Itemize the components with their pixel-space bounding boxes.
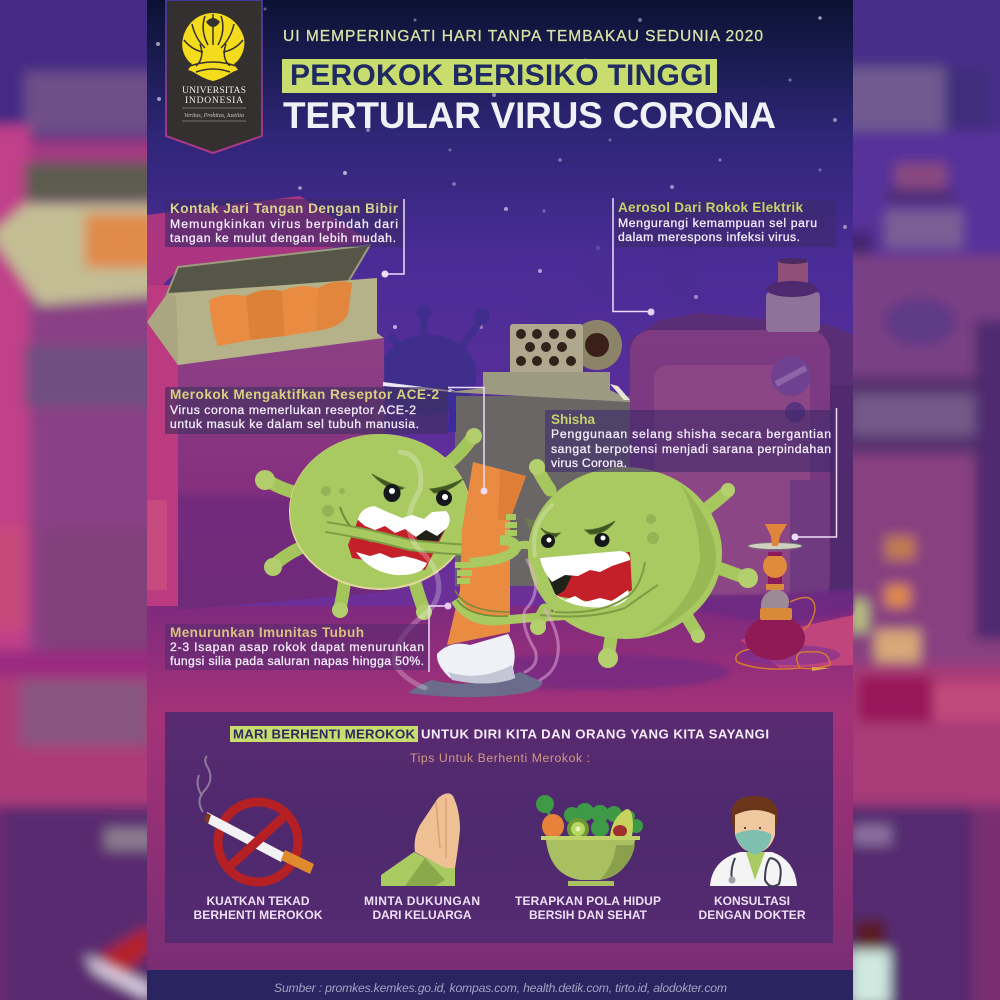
- text: aerosol: dalam merespons infeksi virus.: [618, 230, 800, 244]
- text: university name: UNIVERSITAS: [182, 85, 246, 96]
- central poster background: [147, 0, 853, 1000]
- icon: praying hands: [381, 793, 460, 886]
- panel: immunity: [165, 602, 452, 672]
- text: ACE-2 receptor: [170, 403, 419, 431]
- text: finger to lips: [170, 217, 398, 245]
- text: immunity: fungsi silia pada saluran napas hingga 50%.: [170, 654, 424, 668]
- heading: aerosol: Aerosol Dari Rokok Elektrik: [618, 200, 803, 215]
- blurred left side band: [0, 0, 160, 1000]
- title second line: TERTULAR VIRUS CORONA: [283, 95, 776, 136]
- title highlight: PEROKOK BERISIKO TINGGI: [290, 59, 712, 92]
- text: healthy lifestyle: BERSIH DAN SEHAT: [529, 908, 648, 922]
- text: family support: MINTA DUKUNGAN: [364, 894, 480, 908]
- subheading: Tips Untuk Berhenti Merokok :: [410, 751, 590, 765]
- text: aerosol: Mengurangi kemampuan sel paru: [618, 216, 817, 230]
- heading: ACE-2 receptor: Merokok Mengaktifkan Reseptor ACE-2: [170, 387, 439, 402]
- text: consult doctor: DENGAN DOKTER: [698, 908, 806, 922]
- heading: immunity: Menurunkan Imunitas Tubuh: [170, 625, 364, 640]
- text: immunity: [170, 640, 424, 668]
- floor shadows: [450, 590, 853, 690]
- text: consult doctor: KONSULTASI: [714, 894, 790, 908]
- illustration: lighter: [383, 320, 630, 586]
- heading text: UNTUK DIRI KITA DAN ORANG YANG KITA SAYANGI: [421, 726, 769, 742]
- text: university name: Veritas, Probitas, Iustitia: [184, 112, 244, 119]
- illustration: left virus: [255, 428, 516, 620]
- illustration: right virus: [524, 459, 758, 668]
- text: ACE-2 receptor: untuk masuk ke dalam sel tubuh manusia.: [170, 417, 419, 431]
- subtitle: UI MEMPERINGATI HARI TANPA TEMBAKAU SEDUNIA 2020: [283, 28, 763, 45]
- leader line: ACE-2 receptor: [448, 388, 488, 494]
- text: finger to lips: Memungkinkan virus berpindah dari: [170, 217, 398, 231]
- icon: background smoke shadows: [528, 240, 690, 324]
- heading: finger to lips: Kontak Jari Tangan Dengan Bibir: [170, 201, 399, 216]
- illustration: virus hands around cigarette: [455, 517, 640, 621]
- panel: quit smoking tips: [165, 712, 833, 943]
- icon: no smoking: [198, 756, 314, 882]
- footer sources: Sumber : promkes.kemkes.go.id, kompas.com, health.detik.com, tirto.id, alodokter.com: [274, 981, 727, 995]
- icon: doctor: [710, 796, 797, 886]
- text: shisha: [551, 427, 831, 470]
- leader line: finger to lips: [382, 199, 404, 278]
- text: resolve: KUATKAN TEKAD: [206, 894, 310, 908]
- text: consult doctor: [698, 894, 806, 922]
- icon: university emblem: [182, 13, 244, 81]
- icon: background virus silhouette: [380, 305, 489, 415]
- leader line: immunity: [429, 602, 452, 672]
- text: resolve: [194, 894, 323, 922]
- blurred right side band: [840, 0, 1000, 1000]
- text: healthy lifestyle: [515, 894, 661, 922]
- illustration: rising smoke: [394, 452, 558, 688]
- text: shisha: Penggunaan selang shisha secara bergantian: [551, 427, 831, 441]
- text: shisha: virus Corona.: [551, 456, 627, 470]
- text: aerosol: [618, 216, 817, 244]
- panel: aerosol: [613, 198, 836, 316]
- illustration: burning cigarette: [408, 462, 543, 697]
- logo badge: [166, 0, 262, 153]
- text: shisha: sangat berpotensi menjadi sarana perpindahan: [551, 442, 831, 456]
- heading highlight: MARI BERHENTI MEROKOK: [233, 726, 415, 742]
- icon: salad bowl: [536, 795, 643, 886]
- illustration: hookah: [736, 524, 840, 671]
- stars: [156, 8, 847, 329]
- text: ACE-2 receptor: Virus corona memerlukan reseptor ACE-2: [170, 403, 416, 417]
- text: family support: [364, 894, 480, 922]
- leader line: aerosol: [613, 198, 654, 316]
- panel: finger to lips: [165, 199, 404, 278]
- text: university name: [182, 85, 246, 119]
- text: finger to lips: tangan ke mulut dengan lebih mudah.: [170, 231, 396, 245]
- panel: shisha: [545, 408, 836, 540]
- heading: shisha: Shisha: [551, 412, 595, 427]
- text: healthy lifestyle: TERAPKAN POLA HIDUP: [515, 894, 661, 908]
- text: university name: INDONESIA: [185, 95, 243, 106]
- leader line: shisha: [792, 408, 836, 540]
- text: family support: DARI KELUARGA: [372, 908, 472, 922]
- text: resolve: BERHENTI MEROKOK: [194, 908, 323, 922]
- text: immunity: 2-3 Isapan asap rokok dapat menurunkan: [170, 640, 424, 654]
- panel: ACE-2 receptor: [165, 387, 488, 494]
- illustration: cigarette pack: [147, 245, 385, 610]
- title block: [282, 28, 776, 136]
- illustration: vape mod: [630, 258, 853, 605]
